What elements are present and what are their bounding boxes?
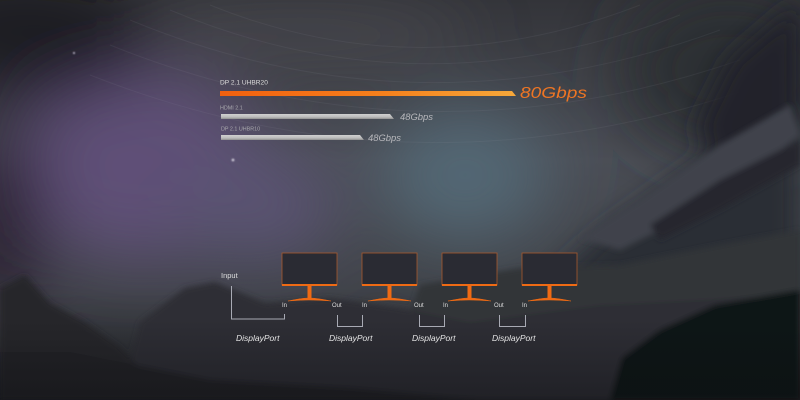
port labels: In xyxy=(443,303,448,309)
DisplayPort labels xyxy=(236,333,536,343)
monitor 3 xyxy=(442,253,497,301)
DisplayPort labels: DisplayPort xyxy=(329,333,373,343)
monitor 2 xyxy=(362,253,417,301)
bar: HDMI 2.1 xyxy=(220,106,434,122)
port labels: In xyxy=(282,303,287,309)
DisplayPort labels: DisplayPort xyxy=(412,333,456,343)
bar: DP 2.1 UHBR20: 80Gbps xyxy=(520,85,587,102)
connectors xyxy=(232,286,526,326)
monitor 4 xyxy=(522,253,577,301)
bar: DP 2.1 UHBR10: DP 2.1 UHBR10 xyxy=(221,126,260,132)
bar: DP 2.1 UHBR10 xyxy=(221,126,402,143)
port labels: In xyxy=(522,303,527,309)
bar: DP 2.1 UHBR10: 48Gbps xyxy=(368,133,402,143)
bar: HDMI 2.1: HDMI 2.1 xyxy=(220,106,243,112)
DisplayPort labels: DisplayPort xyxy=(492,333,536,343)
port labels: In xyxy=(362,303,367,309)
daisy chain diagram xyxy=(221,253,577,343)
bar: DP 2.1 UHBR20: DP 2.1 UHBR20 xyxy=(220,80,268,86)
bar chart: bandwidth comparison xyxy=(220,80,587,143)
DisplayPort labels: DisplayPort xyxy=(236,333,280,343)
port labels: Out xyxy=(494,303,504,309)
port labels: Out xyxy=(414,303,424,309)
port labels xyxy=(282,303,527,309)
port labels: Out xyxy=(332,303,342,309)
bar: DP 2.1 UHBR20 xyxy=(220,80,587,102)
bar: HDMI 2.1: 48Gbps xyxy=(400,112,434,122)
input label: Input xyxy=(221,271,239,280)
monitor 1 xyxy=(282,253,337,301)
